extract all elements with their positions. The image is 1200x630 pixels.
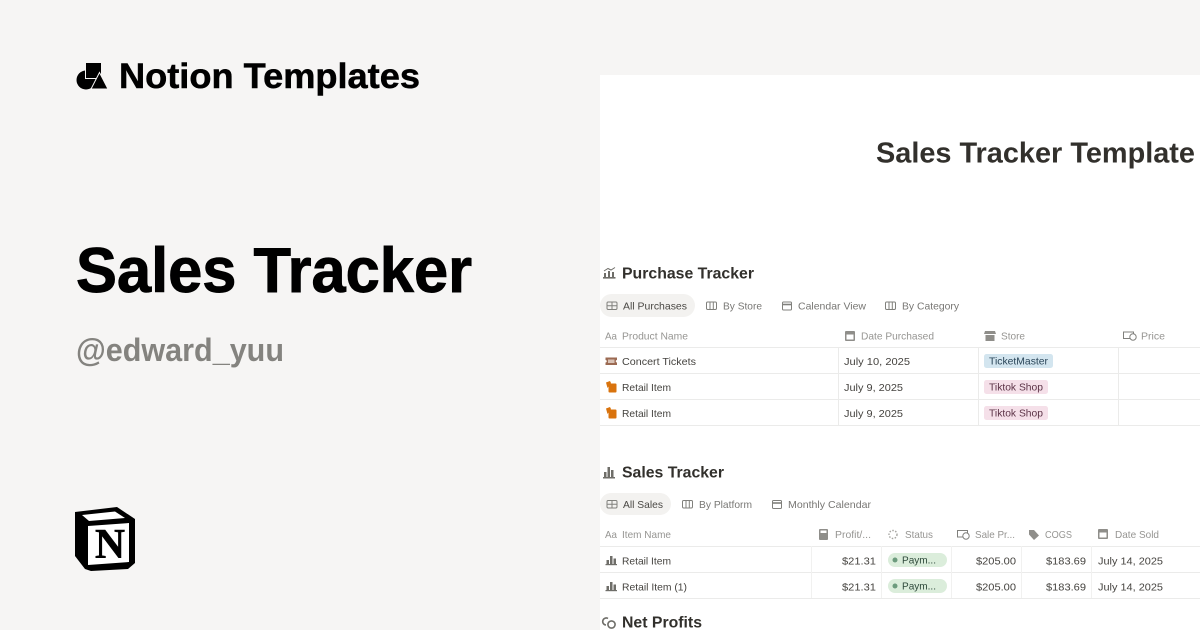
- table: purchases: July 9, 2025: [844, 382, 903, 394]
- table: sales: Aa: [605, 529, 617, 541]
- icon: Notion cube logo: N: [95, 522, 125, 568]
- heading: Sales Tracker: Sales Tracker: [622, 464, 724, 482]
- view tabs: By Store: [723, 300, 762, 312]
- table: purchases: July 9, 2025: [844, 408, 903, 420]
- table: purchases: Aa: [605, 330, 617, 342]
- view tabs: All Purchases: [623, 300, 687, 312]
- table: sales: Paym...: [902, 554, 936, 566]
- table: sales: July 14, 2025: [1098, 582, 1163, 594]
- icon: Notion cube logo: [75, 507, 135, 571]
- panel: template preview: [600, 75, 1200, 630]
- table: sales: $205.00: [976, 556, 1016, 568]
- table: sales: $183.69: [1046, 556, 1086, 568]
- table: sales: Retail Item: [622, 556, 671, 568]
- table: sales: $21.31: [842, 582, 876, 594]
- view tabs: By Category: [902, 300, 960, 312]
- icon: chart with arrow: [603, 268, 616, 279]
- table: purchases: Tiktok Shop: [989, 408, 1043, 420]
- table: sales: July 14, 2025: [1098, 556, 1163, 568]
- table: sales: $21.31: [842, 556, 876, 568]
- table: purchases: [600, 330, 1200, 426]
- table: purchases: Concert Tickets: [622, 356, 696, 368]
- icon: coins: [603, 618, 615, 628]
- table: sales: Item Name: [622, 529, 671, 541]
- view tabs: Calendar View: [798, 300, 866, 312]
- section: Sales Tracker: [600, 464, 1200, 598]
- table: sales: [600, 529, 1200, 598]
- view tabs: [600, 294, 960, 317]
- table: sales: $183.69: [1046, 582, 1086, 594]
- section: Purchase Tracker: [600, 266, 1200, 426]
- heading: Purchase Tracker: Purchase Tracker: [622, 266, 754, 282]
- preview title: Sales Tracker Template: [876, 138, 1195, 170]
- table: purchases: Product Name: [622, 330, 688, 342]
- author handle: @edward_yuu: [76, 332, 284, 368]
- icon: shapes logo: [76, 62, 108, 90]
- table: purchases: TicketMaster: [989, 356, 1048, 368]
- table: purchases: Retail Item: [622, 382, 671, 394]
- table: sales: Profit/...: [835, 529, 871, 541]
- table: purchases: Store: [1001, 330, 1025, 342]
- table: purchases: Date Purchased: [861, 330, 934, 342]
- view tabs: Monthly Calendar: [788, 499, 872, 511]
- table: sales: Sale Pr...: [975, 529, 1015, 541]
- table: purchases: July 10, 2025: [844, 356, 910, 368]
- table: purchases: Price: [1141, 330, 1165, 342]
- heading: Notion Templates: Notion Templates: [119, 57, 420, 96]
- table: sales: Date Sold: [1115, 529, 1159, 541]
- table: sales: Retail Item (1): [622, 582, 687, 594]
- section: Net Profits: [603, 614, 702, 630]
- icon: bar chart: [603, 467, 615, 478]
- view tabs: [600, 493, 872, 515]
- table: sales: $205.00: [976, 582, 1016, 594]
- view tabs: By Platform: [699, 499, 752, 511]
- view tabs: All Sales: [623, 499, 663, 511]
- table: sales: Status: [905, 529, 933, 541]
- table: purchases: Retail Item: [622, 408, 671, 420]
- table: sales: Paym...: [902, 580, 936, 592]
- panel: brand and title: [75, 57, 472, 571]
- table: purchases: Tiktok Shop: [989, 382, 1043, 394]
- table: sales: COGS: [1045, 529, 1072, 541]
- title: Sales Tracker: Sales Tracker: [76, 236, 472, 306]
